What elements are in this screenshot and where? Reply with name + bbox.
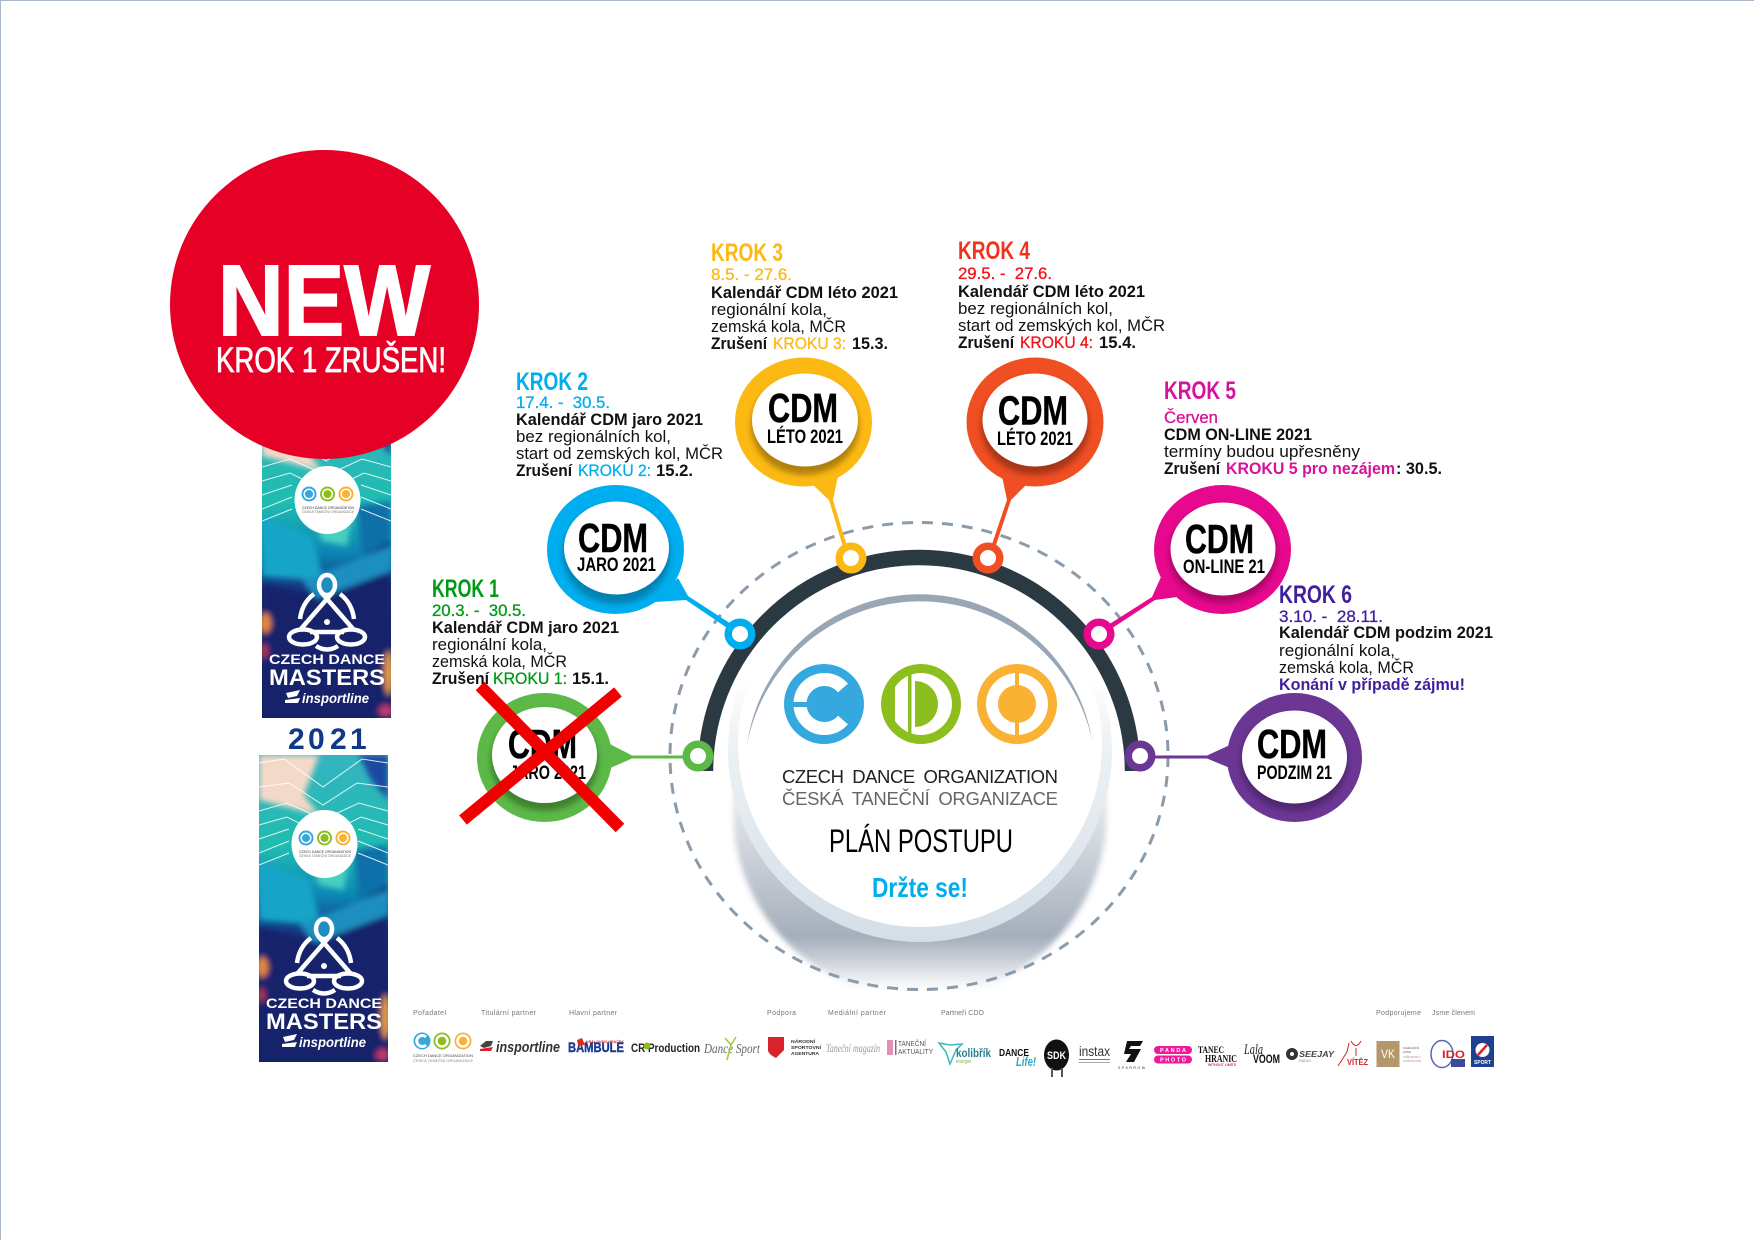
logo: CDO: ČESKÁ TANEČNÍ ORGANIZACE xyxy=(413,1058,473,1063)
footer: partner category labels xyxy=(413,1010,1475,1017)
logo: Národní sportovní agentura: AGENTURA xyxy=(791,1051,820,1057)
logo: Vítěz: VÍTĚZ xyxy=(1347,1058,1368,1067)
text: krok 1: regionální kola, xyxy=(432,635,547,654)
text: krok 3: zemská kola, MČR xyxy=(711,317,846,336)
step 2 pin: JARO 2021 xyxy=(577,555,656,576)
text: krok 2: 17.4. - 30.5. xyxy=(516,393,610,412)
icon: O xyxy=(977,664,1057,744)
text: krok 5: CDM ON-LINE 2021 xyxy=(1164,425,1312,444)
organization name xyxy=(782,766,1058,809)
logo: instax: instax xyxy=(1079,1043,1110,1059)
step 1 pin: JARO 2021 xyxy=(510,763,586,784)
year 2021: 2021 xyxy=(288,723,367,756)
text: krok 3 xyxy=(711,239,898,353)
banner title: CZECH DANCE xyxy=(269,651,385,667)
logo: Taneční aktuality: AKTUALITY xyxy=(898,1047,933,1056)
text: krok 2: KROKU 2: xyxy=(578,461,651,480)
logo: Nadační fond Věduna Kadankové: VĚDUNKY xyxy=(1403,1054,1421,1059)
banner title: MASTERS xyxy=(269,665,385,690)
footer: partner category labels: Hlavní partner xyxy=(569,1010,618,1017)
badge: NEW, krok 1 zrušen xyxy=(170,150,479,459)
step 5 pin: ON-LINE 21 xyxy=(1183,557,1265,578)
text: krok 6: 3.10. - 28.11. xyxy=(1279,607,1383,626)
text: krok 3: KROK 3 xyxy=(711,239,783,267)
logo: Lala Voom: Lala xyxy=(1243,1042,1263,1058)
text: krok 4: 29.5. - 27.6. xyxy=(958,264,1052,283)
logo: Nadační fond Věduna Kadankové: KAŠÁKOVÉ xyxy=(1403,1058,1421,1063)
logo: Nadační fond Věduna Kadankové xyxy=(1376,1041,1421,1067)
icon: dancer knot xyxy=(289,575,365,650)
text: krok 5 xyxy=(1164,377,1442,478)
logo: Bambule: KRÁLOVEVÍ HRAČEK xyxy=(586,1039,624,1044)
text: krok 6: Kalendář CDM podzim 2021 xyxy=(1279,623,1493,642)
logo: IDO: IDO xyxy=(1442,1049,1466,1061)
text: krok 2: 15.2. xyxy=(656,461,693,480)
text: krok 6: zemská kola, MČR xyxy=(1279,658,1414,677)
logo: Dance Life: Life! xyxy=(1016,1054,1036,1069)
logo: CDO: CZECH DANCE ORGANIZATION xyxy=(413,1053,473,1058)
text: krok 2: KROK 2 xyxy=(516,368,588,396)
text: krok 1: zemská kola, MČR xyxy=(432,652,567,671)
logo: SDK: SDK xyxy=(1047,1050,1066,1062)
banner: Czech Dance Masters (lower) xyxy=(256,755,391,1062)
text: krok 1 xyxy=(432,575,619,688)
step 3 pin: CDM xyxy=(768,385,838,431)
banner title xyxy=(266,995,382,1050)
footer: partner category labels: Titulární partner xyxy=(481,1010,537,1017)
text: krok 2: Kalendář CDM jaro 2021 xyxy=(516,410,703,429)
logo badge: CZECH DANCE ORGANIZATION xyxy=(302,506,354,510)
text: krok 4: start od zemských kol, MČR xyxy=(958,316,1165,335)
text: krok 5: Zrušení xyxy=(1164,459,1221,478)
badge: NEW, krok 1 zrušen: NEW xyxy=(218,245,431,357)
logo: kolibřík: kolibřík xyxy=(956,1046,991,1060)
footer: partner category labels: Partneři CDO xyxy=(941,1010,985,1017)
text: krok 2: Zrušení xyxy=(516,461,573,480)
text: krok 1: KROKU 1: xyxy=(493,669,567,688)
footer: partner category labels: Mediální partner xyxy=(828,1010,887,1017)
footer: partner category labels: Podpora xyxy=(767,1010,796,1017)
banner title: insportline xyxy=(299,1034,366,1050)
logo: Dance Life xyxy=(999,1048,1036,1069)
logo: Tanec bez hranic: WITHOUT LIMITS xyxy=(1208,1063,1237,1067)
text: krok 1: Kalendář CDM jaro 2021 xyxy=(432,618,619,637)
logo: Lala Voom: VOOM xyxy=(1253,1052,1280,1066)
footer: partner category labels: Pořadatel xyxy=(413,1010,446,1017)
logo: Taneční magazín: Taneční magazín xyxy=(826,1041,880,1055)
text: krok 5: termíny budou upřesněny xyxy=(1164,442,1360,461)
logo badge: CZECH DANCE ORGANIZATION xyxy=(299,850,351,854)
logo: Národní sportovní agentura xyxy=(768,1037,822,1058)
text: krok 3: Zrušení xyxy=(711,334,768,353)
text: krok 1: 20.3. - 30.5. xyxy=(432,601,526,620)
logo: CDO xyxy=(413,1032,473,1063)
icon: D xyxy=(881,664,961,744)
footer: partner category labels: Jsme členem xyxy=(1432,1010,1475,1017)
logo: Tanec bez hranic: TANEC xyxy=(1198,1045,1224,1055)
text: krok 4: 15.4. xyxy=(1099,333,1136,352)
text: krok 5: Červen xyxy=(1164,408,1218,427)
text: krok 1: 15.1. xyxy=(572,669,609,688)
step 5 pin: CDM xyxy=(1185,516,1254,562)
text: krok 6 xyxy=(1279,581,1493,694)
logo: Sparrow xyxy=(1118,1041,1146,1070)
text: krok 4: Kalendář CDM léto 2021 xyxy=(958,282,1145,301)
logo: Sport: SPORT xyxy=(1474,1060,1491,1066)
logo: Seejay radio: SEEJAY xyxy=(1299,1050,1335,1059)
text: krok 5: : 30.5. xyxy=(1396,459,1442,478)
text: krok 5: KROK 5 xyxy=(1164,377,1236,405)
heading: plán postupu: PLÁN POSTUPU xyxy=(829,823,1013,859)
step 6 pin xyxy=(1124,693,1362,822)
logo: insportline xyxy=(480,1039,560,1056)
text: krok 1: Zrušení xyxy=(432,669,490,688)
text: krok 3: Kalendář CDM léto 2021 xyxy=(711,283,898,302)
logo: Nadační fond Věduna Kadankové: FOND xyxy=(1403,1050,1412,1054)
organization name: ČESKÁ TANEČNÍ ORGANIZACE xyxy=(782,788,1058,809)
text: krok 3: regionální kola, xyxy=(711,300,827,319)
logo: Taneční aktuality: TANEČNÍ xyxy=(898,1039,927,1048)
text: krok 6: Konání v případě zájmu! xyxy=(1279,675,1465,694)
logo: IDO xyxy=(1431,1040,1466,1068)
logo: Panda Photo xyxy=(1154,1046,1192,1064)
banner title: MASTERS xyxy=(266,1009,382,1034)
text: krok 4 xyxy=(958,237,1165,352)
logo: insportline: insportline xyxy=(496,1039,560,1056)
logo: kolibřík: energie xyxy=(956,1059,971,1065)
logo badge: ČESKÁ TANEČNÍ ORGANIZACE xyxy=(299,853,352,858)
tagline: Držte se! xyxy=(872,872,968,903)
logo: Nadační fond Věduna Kadankové: NADAČNÍ xyxy=(1403,1045,1419,1050)
badge: NEW, krok 1 zrušen: KROK 1 ZRUŠEN! xyxy=(216,341,446,380)
logo: Lala Voom xyxy=(1243,1042,1280,1066)
logo: Tanec bez hranic: HRANIC xyxy=(1205,1054,1237,1065)
step 6 pin: PODZIM 21 xyxy=(1257,763,1332,784)
text: krok 5: KROKU 5 pro nezájem xyxy=(1226,459,1395,478)
logo: Národní sportovní agentura: SPORTOVNÍ xyxy=(791,1043,822,1051)
footer: partner logos xyxy=(413,1032,1494,1077)
central disc with shadow xyxy=(728,558,1112,998)
timeline arc xyxy=(706,558,1132,771)
logo: Seejay radio: RADIO xyxy=(1299,1058,1311,1063)
step 4 pin: CDM xyxy=(998,388,1068,434)
logo: Sparrow: SPARROW xyxy=(1118,1066,1146,1070)
logo: Taneční aktuality xyxy=(887,1039,933,1056)
step 4 pin xyxy=(966,358,1104,574)
logo: Národní sportovní agentura: NÁRODNÍ xyxy=(791,1037,816,1045)
logo: Bambule: BAMBULE xyxy=(568,1039,624,1055)
text: krok 3: 15.3. xyxy=(852,334,888,353)
dashed orbit xyxy=(670,522,1168,990)
logo: Vítěz xyxy=(1338,1041,1368,1067)
logo: Sport xyxy=(1471,1036,1494,1067)
logo: DanceSport: Dance Sport xyxy=(703,1042,761,1057)
logo: CR Production: CR Production xyxy=(631,1041,700,1055)
icon: dancer knot xyxy=(286,919,362,994)
step 1 pin xyxy=(477,693,714,822)
text: krok 2: start od zemských kol, MČR xyxy=(516,444,723,463)
logo: SDK xyxy=(1044,1040,1069,1077)
logo badge xyxy=(292,810,358,878)
text: krok 4: Zrušení xyxy=(958,333,1015,352)
red cross over step 1 xyxy=(463,686,620,828)
logo: Dance Life: DANCE xyxy=(999,1048,1029,1059)
step 1 pin: CDM xyxy=(508,721,577,767)
text: krok 3: 8.5. - 27.6. xyxy=(711,265,792,284)
banner title: CZECH DANCE xyxy=(266,995,382,1011)
logo: DanceSport xyxy=(703,1037,761,1060)
step 3 pin xyxy=(735,358,872,574)
organization name: CZECH DANCE ORGANIZATION xyxy=(782,766,1058,787)
banner title: insportline xyxy=(302,690,369,706)
text: krok 1: KROK 1 xyxy=(432,575,499,603)
logo: Tanec bez hranic xyxy=(1198,1045,1237,1067)
text: krok 2 xyxy=(516,368,723,480)
icon: C xyxy=(784,664,864,744)
step 2 pin: CDM xyxy=(578,515,648,561)
step 4 pin: LÉTO 2021 xyxy=(997,428,1073,450)
text: krok 4: bez regionálních kol, xyxy=(958,299,1113,318)
logo: Panda Photo: PHOTO xyxy=(1160,1058,1187,1064)
banner title xyxy=(269,651,385,706)
text: krok 4: KROKU 4: xyxy=(1020,333,1093,352)
text: krok 2: bez regionálních kol, xyxy=(516,427,671,446)
step 6 pin: CDM xyxy=(1257,721,1327,767)
logo: Panda Photo: PANDA xyxy=(1160,1048,1186,1054)
logo: kolibřík xyxy=(939,1043,991,1065)
step 2 pin xyxy=(547,485,756,650)
step 3 pin: LÉTO 2021 xyxy=(767,426,843,448)
footer: partner category labels: Podporujeme xyxy=(1376,1010,1421,1017)
logo: Seejay radio xyxy=(1286,1048,1335,1063)
logo badge xyxy=(294,466,360,534)
logo badge: ČESKÁ TANEČNÍ ORGANIZACE xyxy=(302,509,355,514)
text: krok 4: KROK 4 xyxy=(958,237,1030,265)
banner: Czech Dance Masters (upper) xyxy=(262,444,391,718)
step 5 pin xyxy=(1084,485,1291,650)
centre logo: CDO xyxy=(784,664,1057,744)
logo: Nadační fond Věduna Kadankové: VK xyxy=(1381,1047,1395,1061)
text: krok 3: KROKU 3: xyxy=(773,334,846,353)
text: krok 6: regionální kola, xyxy=(1279,641,1395,660)
logo: instax xyxy=(1079,1043,1110,1063)
text: krok 6: KROK 6 xyxy=(1279,581,1352,609)
